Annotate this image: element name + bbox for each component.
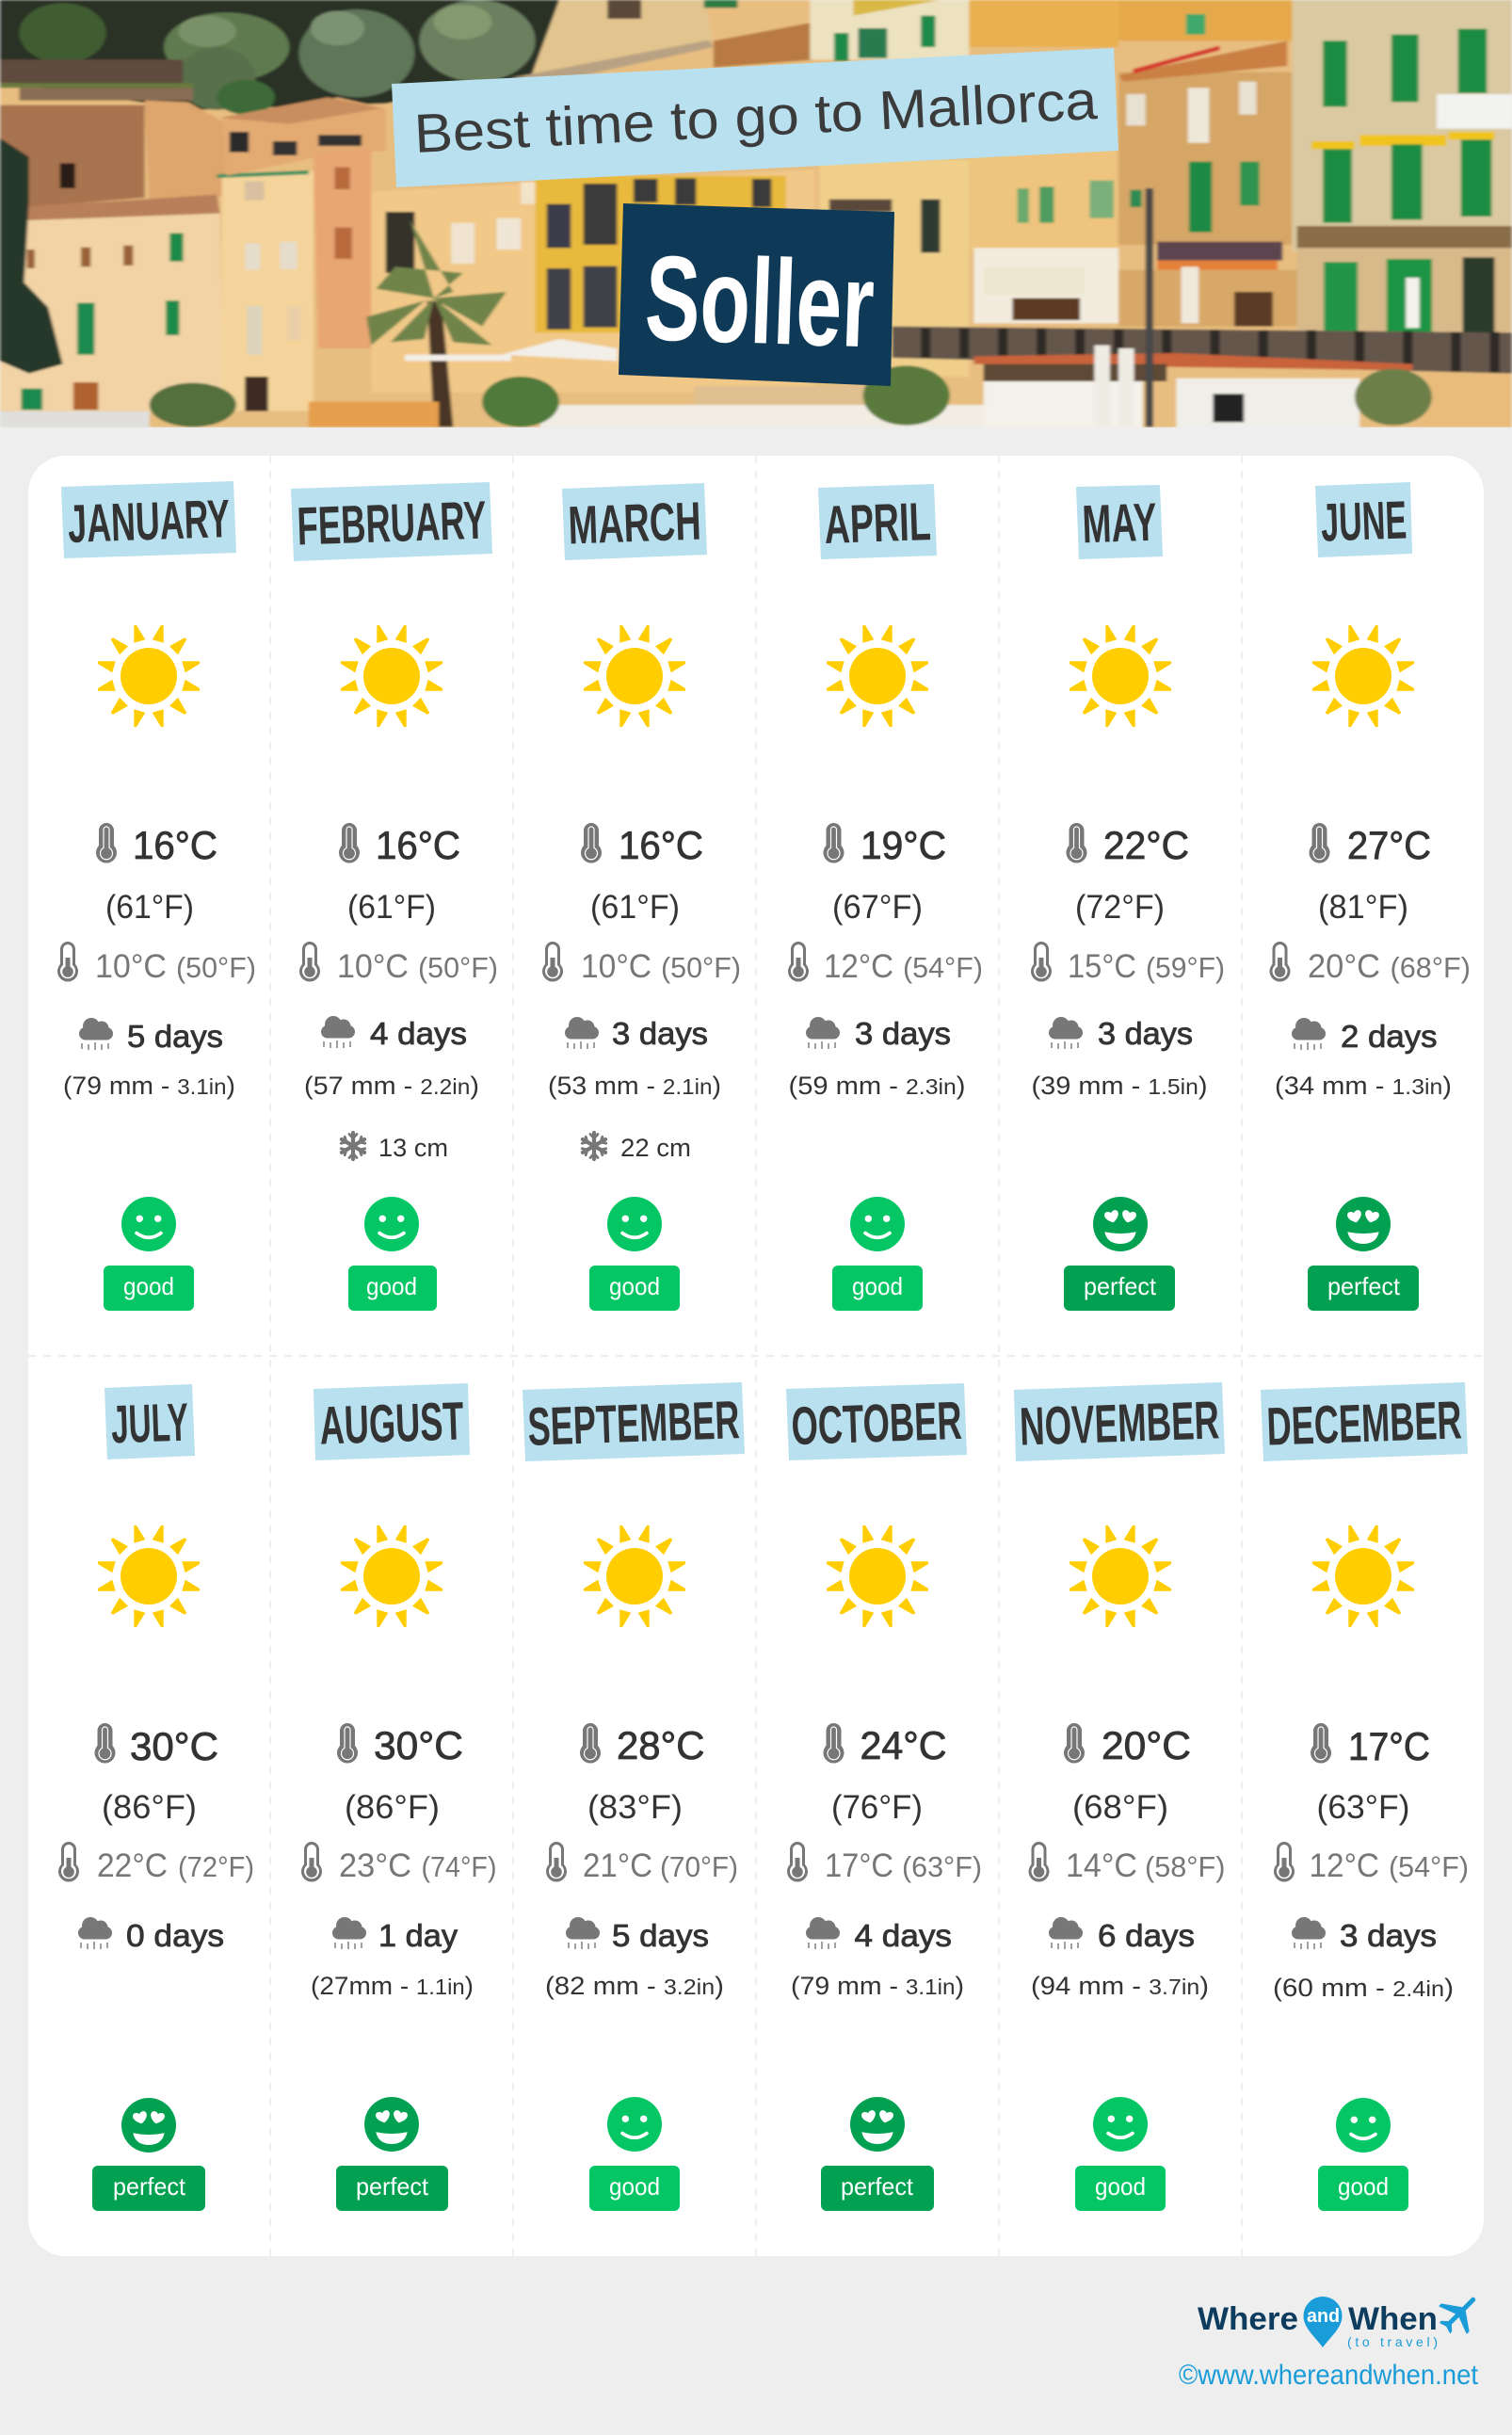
low temperature [1066,1847,1226,1884]
icon: sun [341,1525,442,1627]
high temperature: 22°C [1103,823,1189,867]
panel: August [301,1383,497,2211]
low temperature: (74°F) [422,1850,497,1883]
heading: May: MAY [1081,492,1158,555]
logo: Where and When (to travel): When [1348,2301,1438,2337]
rating: perfect: perfect [113,2172,186,2201]
rainfall: (39 mm - 1.5in) [1032,1072,1207,1100]
high temperature: 28°C [617,1723,704,1767]
icon: thermometer low [301,1842,322,1882]
heading: May [1076,485,1163,559]
low temperature: 12°C [1309,1847,1379,1884]
high temperature: 20°C [1102,1723,1191,1767]
title banner: Best time to go to Mallorca: Best time to go to Mallorca [412,70,1100,165]
rating: good [832,1266,923,1311]
heading: November [1014,1382,1225,1461]
rain days: 5 days [612,1918,709,1953]
rating: good: good [1338,2172,1389,2201]
low temperature: (70°F) [660,1850,738,1883]
low temperature [337,948,498,985]
heading: September [523,1382,745,1461]
snowfall: 13 cm [378,1134,448,1162]
icon: thermometer low [299,942,320,982]
icon: rain cloud [321,1016,355,1048]
heading: June [1315,482,1412,557]
rain days: 5 days [127,1019,223,1054]
low temperature: 17°C [825,1847,893,1884]
heading: April: APRIL [823,492,932,556]
icon: thermometer high [1311,1723,1331,1764]
high temperature fahrenheit: (68°F) [1072,1789,1168,1826]
rating: perfect: perfect [841,2172,914,2201]
low temperature: 21°C [583,1847,652,1884]
rating: perfect [821,2166,934,2211]
icon: thermometer high [823,1723,844,1764]
rating: good [589,1266,680,1311]
icon: sun [827,625,928,727]
high temperature fahrenheit: (76°F) [831,1789,923,1826]
low temperature: (68°F) [1390,951,1471,984]
high temperature fahrenheit: (72°F) [1075,889,1165,926]
icon: thermometer high [823,823,844,863]
low temperature [581,948,741,985]
panel: May [1031,485,1225,1311]
heading: January: JANUARY [67,489,231,555]
heading: July: JULY [110,1393,189,1455]
low temperature: (50°F) [176,951,256,984]
rain days: 2 days [1341,1019,1437,1054]
heading: January [61,481,236,558]
heading: November: NOVEMBER [1019,1390,1220,1458]
icon: perfect smiley [1336,1197,1391,1251]
icon: thermometer low [58,1842,79,1882]
low temperature [95,948,256,985]
icon: rain cloud [806,1017,840,1049]
icon: sun [1070,1525,1171,1627]
rating: perfect [1308,1266,1419,1311]
rain days: 4 days [370,1016,467,1051]
rating: perfect [92,2166,205,2211]
icon: thermometer low [57,942,78,982]
high temperature: 16°C [133,823,217,867]
rating: good: good [123,1272,174,1300]
rainfall: (27mm - 1.1in) [311,1972,474,2000]
low temperature: (59°F) [1146,951,1225,984]
icon: good smiley [607,2097,662,2152]
rating: good [348,1266,437,1311]
icon: thermometer high [1066,823,1086,863]
icon: good smiley [1093,2097,1148,2152]
rating: good [1318,2166,1408,2211]
icon: thermometer high [1309,823,1329,863]
icon: sun [584,1525,685,1627]
icon: snowflake [582,1133,606,1159]
heading: April [818,484,937,559]
icon: rain cloud [78,1917,112,1949]
low temperature: 10°C [95,948,167,985]
rainfall: (79 mm - 3.1in) [791,1972,964,2000]
heading: June: JUNE [1320,490,1407,554]
icon: perfect smiley [850,2097,905,2152]
high temperature fahrenheit: (83°F) [587,1789,683,1826]
panel: October [786,1383,982,2211]
icon: good smiley [1336,2098,1391,2153]
icon: thermometer high [96,823,117,863]
high temperature: 19°C [861,823,946,867]
icon: thermometer high [94,1723,115,1764]
low temperature [825,1847,982,1884]
low temperature: 15°C [1068,948,1136,985]
icon: thermometer high [1064,1723,1085,1764]
rating: good [104,1266,194,1311]
low temperature: 14°C [1066,1847,1137,1884]
icon: sun [1312,1525,1414,1627]
low temperature [583,1847,738,1884]
heading: September: SEPTEMBER [527,1390,741,1458]
rainfall: (82 mm - 3.2in) [545,1972,724,2000]
icon: rain cloud [1049,1917,1083,1949]
rain days: 4 days [855,1918,952,1953]
rain days: 6 days [1098,1918,1195,1953]
low temperature [1309,1847,1469,1884]
icon: thermometer high [339,823,360,863]
icon: good smiley [364,1197,419,1251]
icon: thermometer low [788,942,809,982]
icon: rain cloud [1292,1018,1326,1050]
icon: rain cloud [79,1018,113,1050]
low temperature: 10°C [581,948,651,985]
heading: March: MARCH [567,492,702,556]
icon: sun [341,625,442,727]
panel: April [788,484,983,1311]
place name banner: Soller [619,203,894,386]
high temperature: 16°C [619,823,703,867]
rainfall: (57 mm - 2.2in) [304,1072,479,1100]
snowfall: 22 cm [620,1134,691,1162]
rainfall: (34 mm - 1.3in) [1275,1072,1452,1100]
icon: snowflake [341,1133,365,1159]
title banner: Best time to go to Mallorca [392,48,1118,187]
panel: December [1261,1382,1469,2211]
icon: good smiley [607,1197,662,1251]
icon: perfect smiley [364,2097,419,2152]
panel: July [58,1384,254,2211]
high temperature: 16°C [376,823,460,867]
icon: good smiley [121,1197,176,1251]
high temperature fahrenheit: (61°F) [590,889,680,926]
low temperature: (54°F) [903,951,983,984]
low temperature: 12°C [824,948,893,985]
icon: perfect smiley [121,2098,176,2153]
icon: thermometer low [546,1842,567,1882]
panel: February [291,482,498,1311]
high temperature fahrenheit: (61°F) [347,889,436,926]
low temperature: 23°C [339,1847,411,1884]
rating: perfect [1064,1266,1175,1311]
rain days: 3 days [1340,1918,1437,1953]
icon: thermometer low [787,1842,808,1882]
heading: February [291,482,492,561]
heading: October [786,1383,967,1460]
icon: thermometer low [1269,942,1290,982]
rainfall: (94 mm - 3.7in) [1031,1972,1209,2000]
high temperature: 17°C [1348,1724,1430,1768]
low temperature [1068,948,1225,985]
icon: thermometer high [581,823,602,863]
low temperature [339,1847,497,1884]
icon: rain cloud [1049,1017,1083,1049]
rain days: 1 day [378,1918,458,1953]
logo: Where and When (to travel): (to travel) [1347,2334,1438,2349]
place name banner: Soller: Soller [643,231,877,373]
rating: perfect [336,2166,448,2211]
high temperature fahrenheit: (86°F) [345,1789,440,1826]
rating: good: good [609,1272,660,1300]
rating: good: good [366,1272,417,1300]
rain days: 3 days [855,1016,951,1051]
icon: sun [584,625,685,727]
icon: sun [827,1525,928,1627]
icon: rain cloud [565,1017,599,1049]
heading: October: OCTOBER [791,1391,963,1457]
high temperature: 24°C [861,1723,947,1767]
low temperature: 20°C [1308,948,1380,985]
rating: perfect: perfect [1084,1272,1157,1300]
icon: rain cloud [806,1917,840,1949]
icon: perfect smiley [1093,1197,1148,1251]
panel: January [57,481,256,1311]
panel: November [1014,1382,1226,2211]
low temperature: (72°F) [178,1850,254,1883]
high temperature fahrenheit: (86°F) [102,1789,197,1826]
heading: July [105,1384,195,1459]
rainfall: (59 mm - 2.3in) [789,1072,966,1100]
panel: September [523,1382,745,2211]
icon: thermometer low [1028,1842,1049,1882]
low temperature [97,1847,254,1884]
rating: good [1075,2166,1166,2211]
heading: August [314,1383,470,1460]
low temperature [1308,948,1471,985]
heading: February: FEBRUARY [297,491,488,556]
icon: sun [98,625,200,727]
rainfall: (79 mm - 3.1in) [63,1072,235,1100]
heading: August: AUGUST [318,1391,465,1457]
logo: Where and When (to travel): Where [1198,2301,1298,2337]
high temperature fahrenheit: (81°F) [1318,889,1408,926]
icon: rain cloud [1292,1917,1326,1949]
rating: good [589,2166,680,2211]
high temperature fahrenheit: (67°F) [832,889,923,926]
rating: good: good [1095,2172,1146,2201]
icon: thermometer low [542,942,563,982]
rating: perfect: perfect [1327,1272,1401,1300]
rainfall: (60 mm - 2.4in) [1273,1974,1454,2002]
high temperature fahrenheit: (63°F) [1316,1789,1410,1826]
icon: rain cloud [566,1917,600,1949]
logo: Where and When (to travel): and [1307,2306,1340,2327]
panel: June [1269,482,1471,1311]
icon: sun [1312,625,1414,727]
rating: good: good [609,2172,660,2201]
icon: rain cloud [332,1917,366,1949]
icon: thermometer high [580,1723,601,1764]
high temperature fahrenheit: (61°F) [105,889,194,926]
icon: thermometer high [337,1723,358,1764]
icon: sun [1070,625,1171,727]
rainfall: (53 mm - 2.1in) [548,1072,721,1100]
panel: March [542,483,741,1311]
icon: thermometer low [1274,1842,1295,1882]
rain days: 0 days [126,1918,224,1953]
panel: calendar card [28,456,1484,2256]
low temperature [824,948,983,985]
high temperature: 30°C [374,1723,463,1767]
low temperature: (50°F) [661,951,741,984]
low temperature: (50°F) [418,951,498,984]
icon: thermometer low [1031,942,1052,982]
rain days: 3 days [1098,1016,1193,1051]
logo: Where and When (to travel) [1198,2284,1488,2349]
low temperature: 10°C [337,948,409,985]
photo: Soller harbour buildings [0,0,1512,427]
low temperature: (54°F) [1389,1850,1469,1883]
heading: March [562,483,707,560]
low temperature: 22°C [97,1847,168,1884]
rating: perfect: perfect [356,2172,429,2201]
high temperature: 27°C [1347,823,1431,867]
high temperature: 30°C [130,1724,218,1768]
icon: good smiley [850,1197,905,1251]
low temperature: (58°F) [1145,1850,1226,1883]
rating: good: good [852,1272,903,1300]
low temperature: (63°F) [902,1850,982,1883]
rain days: 3 days [612,1016,708,1051]
icon: sun [98,1525,200,1627]
website credit: ©www.whereandwhen.net [1179,2360,1479,2391]
